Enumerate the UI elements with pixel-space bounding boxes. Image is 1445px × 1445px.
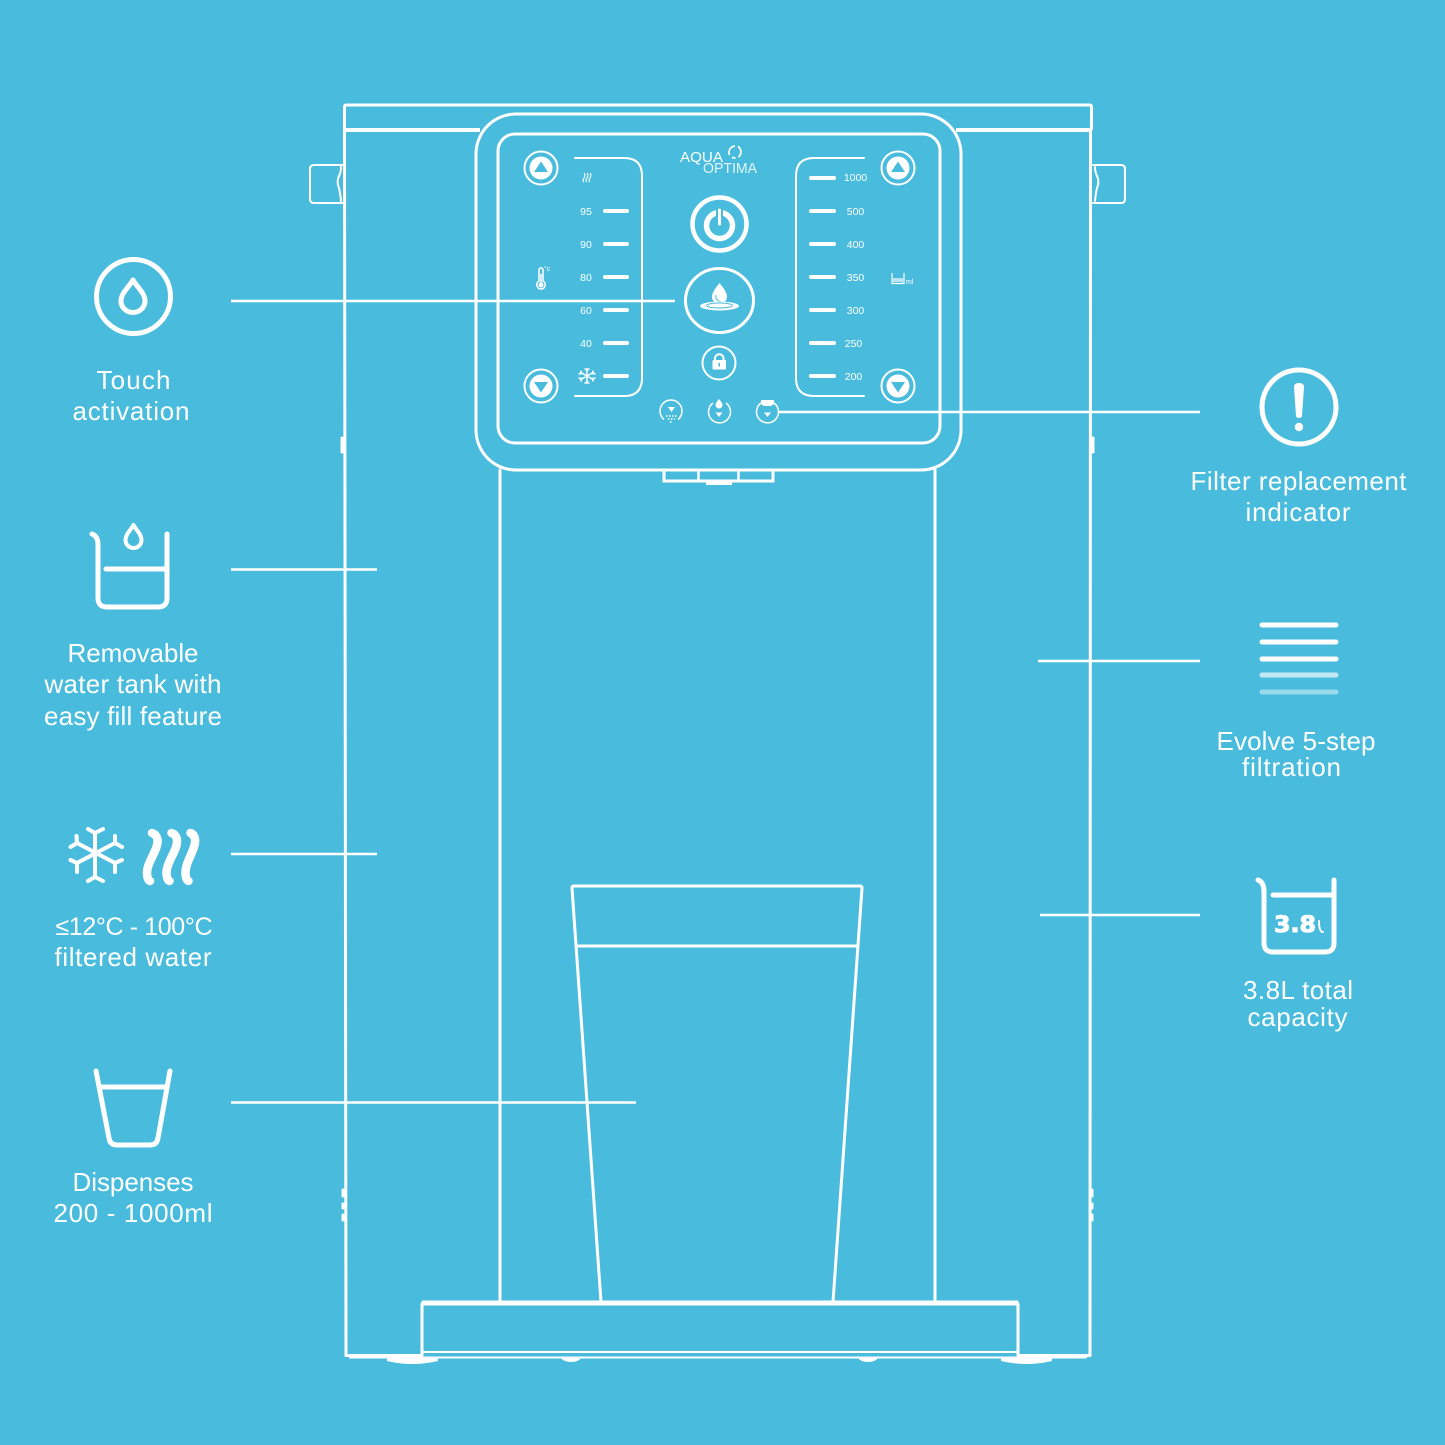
temperature labels: 60	[580, 305, 592, 317]
feature: water tank	[44, 525, 222, 731]
volume labels: 200	[845, 371, 862, 383]
label: temperature: filtered water	[54, 942, 212, 972]
dispensing bay	[500, 470, 935, 1302]
volume labels: 300	[847, 305, 864, 317]
thermometer icon	[537, 265, 551, 289]
small snowflake icon	[578, 368, 596, 384]
label: filter replacement: Filter replacement	[1190, 466, 1407, 496]
volume labels	[811, 172, 867, 383]
thermometer icon: °c	[544, 265, 551, 273]
label: capacity: 3.8L total	[1243, 975, 1353, 1005]
label: filtration: Evolve 5-step	[1216, 726, 1376, 756]
body	[344, 129, 1090, 1356]
logo: OPTIMA	[703, 160, 757, 177]
callout line: filtration	[1038, 660, 1200, 662]
icon: capacity beaker	[1258, 880, 1334, 952]
beaker ml icon	[892, 273, 914, 286]
feature: touch activation	[72, 260, 190, 426]
label: filtration	[1216, 726, 1376, 782]
volume labels: 1000	[844, 172, 867, 184]
label: temperature: ≤12°C - 100°C	[56, 913, 212, 941]
temperature labels	[580, 206, 627, 376]
descale icon	[708, 399, 730, 423]
top lid	[344, 105, 1092, 130]
spout	[664, 471, 773, 485]
base line and feet	[350, 1356, 1086, 1358]
icon: glass	[96, 1071, 170, 1145]
control panel	[476, 114, 961, 470]
icon: five filter layers	[1262, 625, 1336, 692]
callout line: filter replacement	[778, 411, 1200, 413]
feature: temperature	[54, 829, 212, 972]
label: touch activation: activation	[72, 396, 190, 426]
callout line: water tank	[231, 568, 377, 571]
callout line: dispenses	[231, 1101, 636, 1104]
feature: filtration	[1216, 625, 1376, 782]
small heat icon	[583, 173, 591, 182]
label: capacity	[1243, 975, 1353, 1032]
callout line: touch activation	[231, 300, 675, 302]
temperature scale bracket	[575, 158, 642, 396]
panel inner frame	[498, 134, 940, 443]
dispense button	[686, 268, 754, 332]
volume scale bracket	[796, 158, 864, 396]
label: dispenses: Dispenses	[72, 1167, 194, 1197]
water dispenser outline	[310, 105, 1125, 1364]
label: water tank: water tank with	[44, 669, 222, 699]
volume labels: 500	[847, 206, 864, 218]
label: water tank	[44, 638, 222, 731]
logo	[680, 146, 757, 177]
temperature labels: 80	[580, 272, 592, 284]
down button right	[882, 370, 914, 402]
feature: dispenses	[54, 1071, 212, 1228]
temperature labels: 95	[580, 206, 592, 218]
power button	[692, 198, 746, 250]
beaker ml icon: ml	[906, 279, 914, 286]
label: filter replacement: indicator	[1246, 497, 1351, 527]
label: water tank: easy fill feature	[44, 701, 222, 731]
icon: tank with drop	[92, 525, 167, 607]
reset icon	[660, 400, 682, 422]
drip tray	[422, 1302, 1018, 1354]
label: touch activation: Touch	[96, 365, 170, 395]
label: filtration: filtration	[1242, 752, 1341, 782]
volume labels: 250	[845, 338, 862, 350]
label: capacity: capacity	[1248, 1002, 1348, 1032]
callout line: temperature	[231, 853, 377, 855]
callout line: capacity	[1040, 914, 1200, 916]
up button right	[882, 152, 914, 184]
panel outer frame	[476, 114, 961, 470]
up button left	[524, 152, 558, 184]
icon: exclamation	[1262, 370, 1336, 444]
glass	[572, 886, 862, 1302]
filter icon	[757, 400, 779, 423]
volume labels: 350	[847, 272, 864, 284]
down button left	[524, 370, 558, 402]
label: dispenses: 200 - 1000ml	[54, 1198, 212, 1228]
label: touch activation	[72, 365, 190, 426]
icon: snowflake	[70, 829, 122, 881]
feature: filter replacement	[1190, 370, 1407, 527]
temperature labels: 90	[580, 239, 592, 251]
label: water tank: Removable	[68, 638, 198, 668]
volume labels: 400	[847, 239, 864, 251]
side notches	[342, 438, 1093, 1220]
label: temperature	[54, 913, 212, 972]
logo: AQUA	[680, 150, 723, 166]
icon: touch drop	[96, 260, 170, 334]
icon: heat waves	[147, 833, 195, 881]
feature: capacity	[1243, 880, 1353, 1032]
label: filter replacement	[1190, 466, 1407, 527]
icon: capacity beaker: 3.8	[1274, 913, 1316, 938]
temperature labels: 40	[580, 338, 592, 350]
left handle	[310, 165, 343, 203]
label: dispenses	[54, 1167, 212, 1228]
right handle	[1093, 165, 1125, 203]
lock button	[702, 346, 736, 380]
